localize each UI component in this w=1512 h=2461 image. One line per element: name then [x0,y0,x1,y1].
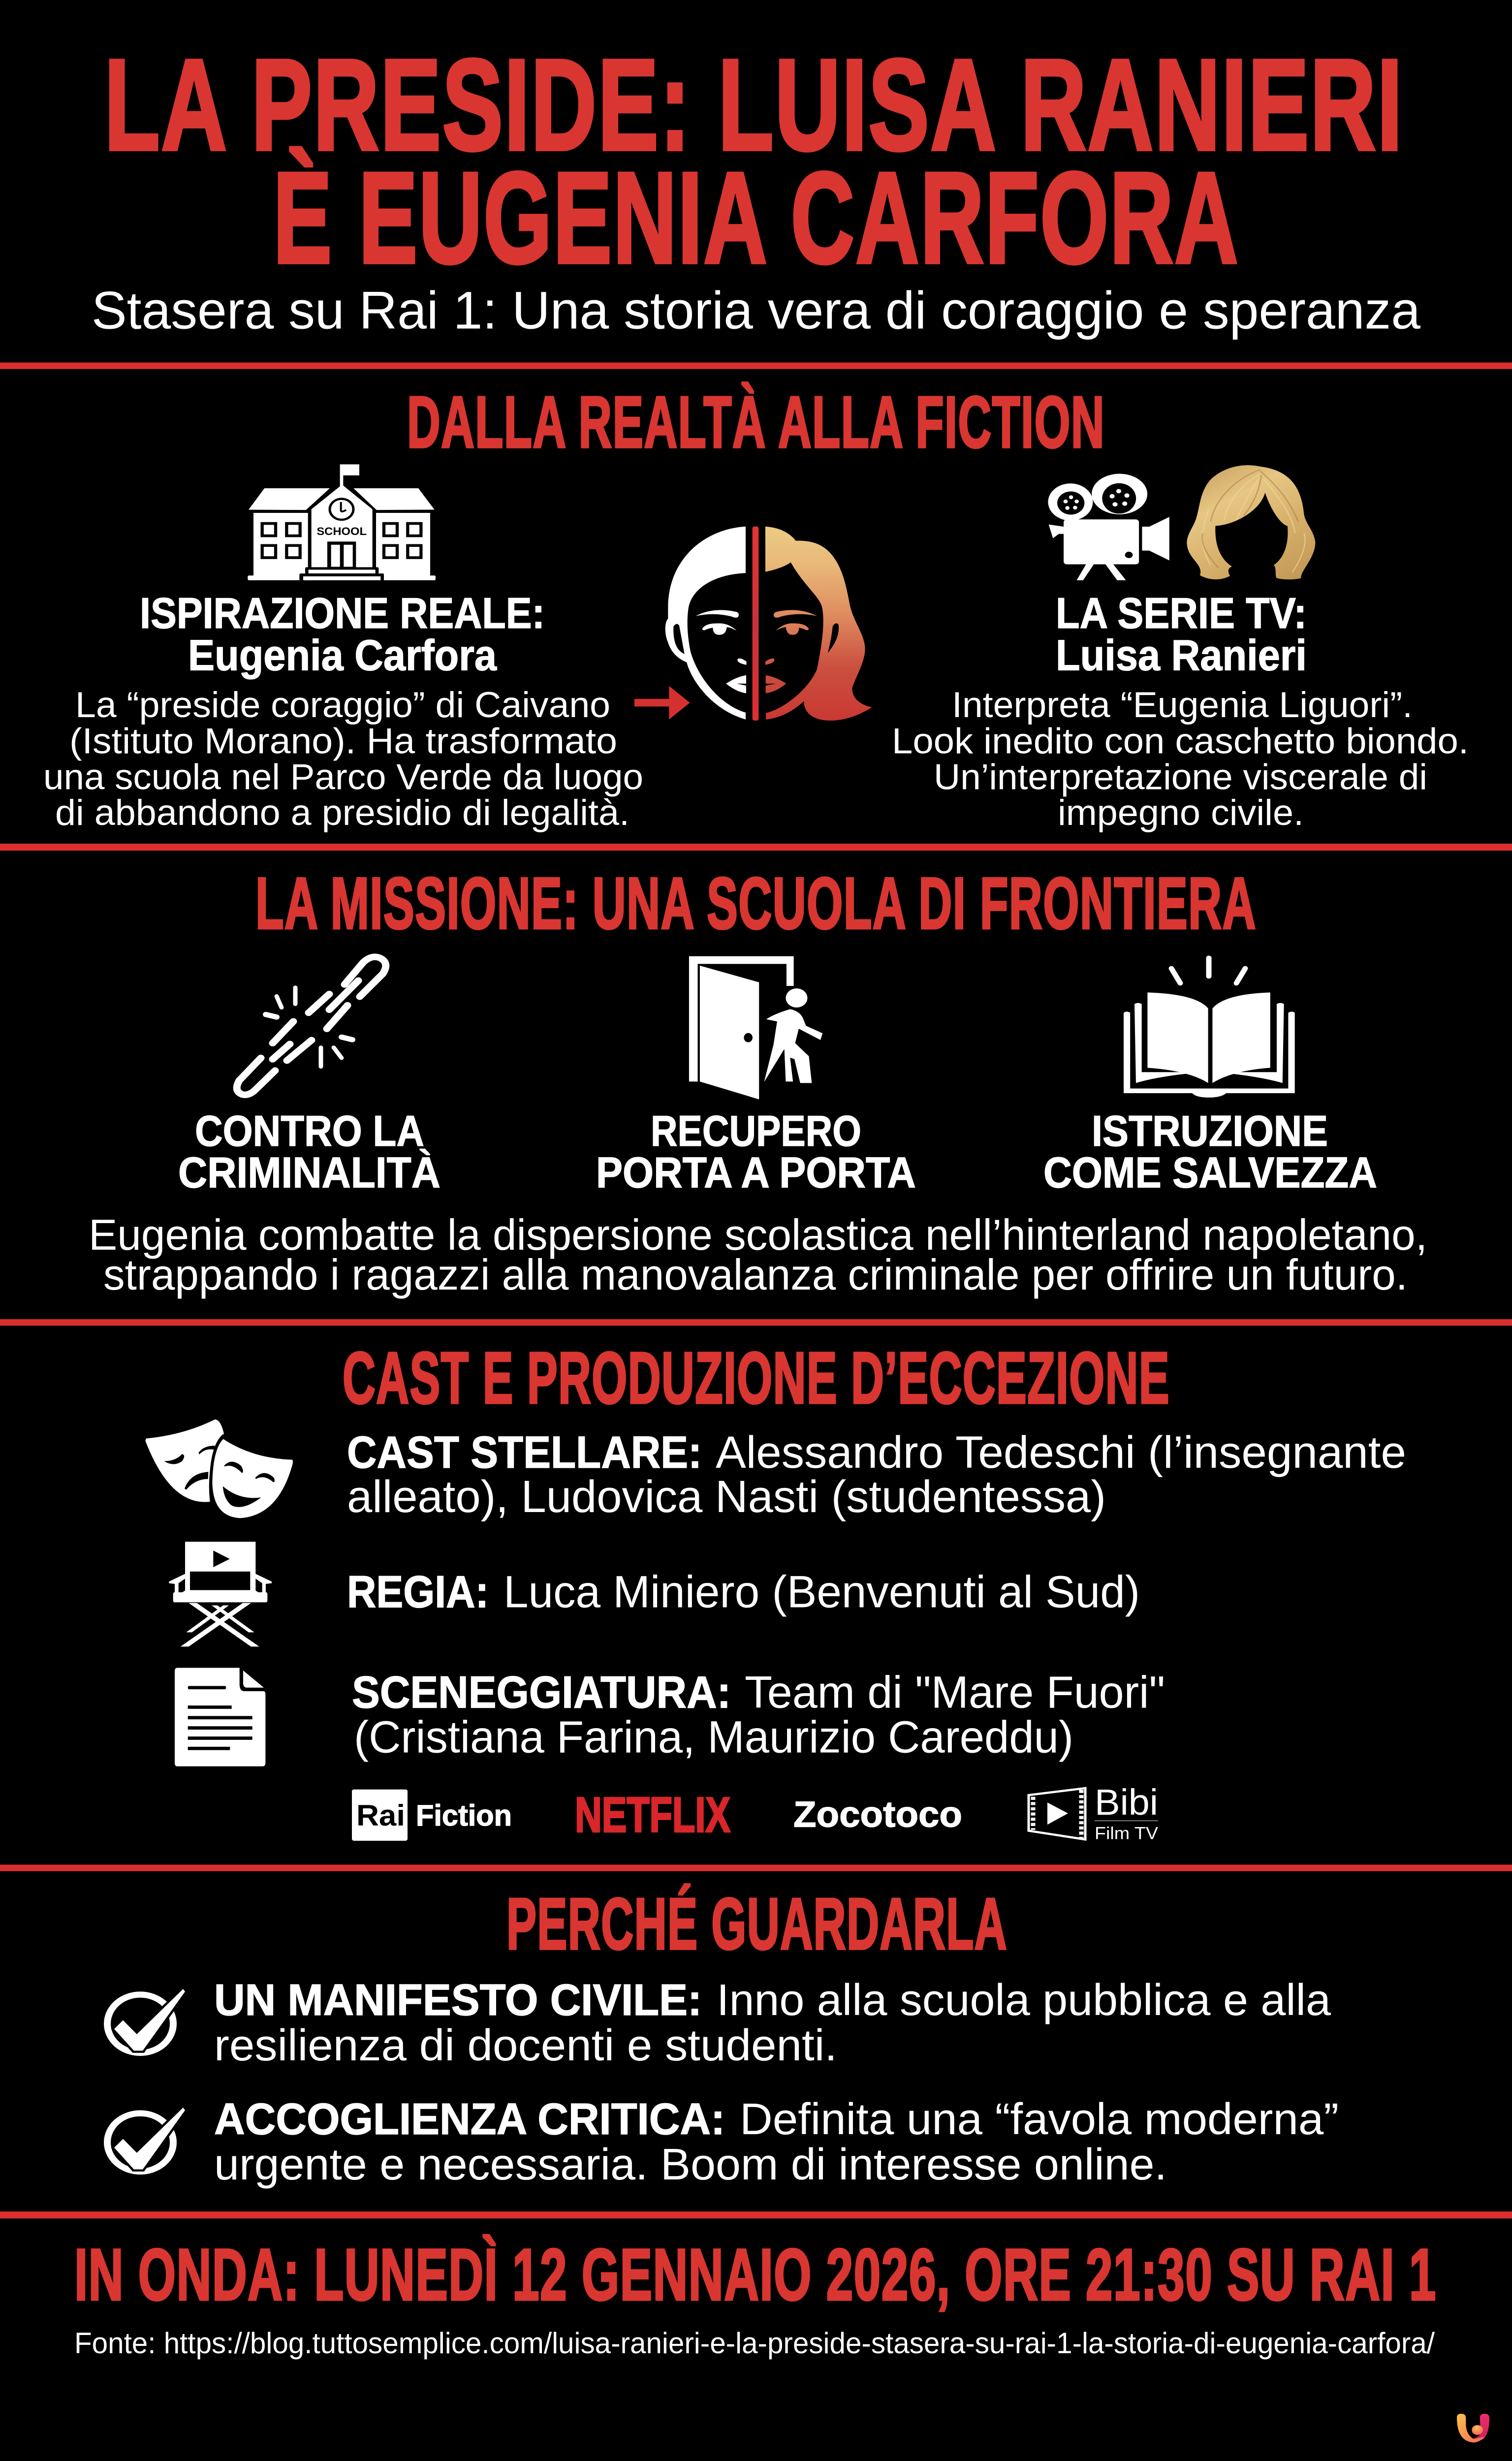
icon: open book [1124,958,1295,1098]
sceneggiatura text: SCENEGGIATURA: [352,1667,731,1717]
mission description [89,1210,1427,1299]
accoglienza critica text: Definita una “favola moderna” [740,2094,1339,2144]
right column: la serie tv: Un’interpretazione viscerale di [934,757,1427,797]
title [104,32,1404,290]
sceneggiatura text: Team di "Mare Fuori" [745,1667,1165,1717]
icon: check mark 2 [107,2108,185,2172]
logo: bibi film tv [1029,1781,1158,1843]
label: contro la criminalità: CRIMINALITÀ [178,1148,441,1197]
right column: la serie tv: Interpreta “Eugenia Liguori”. [952,685,1413,725]
left column: ispirazione reale: Eugenia Carfora [188,631,497,679]
right column: la serie tv: LA SERIE TV: [1056,589,1307,637]
icon: school: SCHOOL [316,525,367,537]
logo: rai fiction: Rai [356,1799,405,1832]
right column: la serie tv: impegno civile. [1058,792,1304,833]
icon: school [248,464,436,581]
label: recupero porta a porta: RECUPERO [651,1106,861,1155]
left column: ispirazione reale: una scuola nel Parco Verde da luogo [43,757,643,797]
right column: la serie tv: Look inedito con caschetto biondo. [892,721,1469,761]
un manifesto civile text: resilienza di docenti e studenti. [214,2020,837,2070]
panel: footer [74,2234,1489,2442]
un manifesto civile text: Inno alla scuola pubblica e alla [717,1975,1331,2025]
label: contro la criminalità [178,1106,441,1197]
icon: screenplay document [175,1668,265,1767]
arrow [634,686,690,720]
panel: perché guardarla [107,1883,1339,2189]
icon: door and walking person [689,956,822,1100]
regia text: REGIA: [347,1566,489,1617]
right column: la serie tv: Luisa Ranieri [1056,631,1307,679]
left column: ispirazione reale: di abbandono a presidio di legalità. [55,792,630,833]
cast stellare text: CAST STELLARE: [347,1427,702,1478]
panel: dalla realtà alla fiction [43,381,1469,833]
cast stellare text: Alessandro Tedeschi (l’insegnante [716,1427,1406,1478]
logo: rai fiction: Fiction [416,1799,512,1832]
regia text: Luca Miniero (Benvenuti al Sud) [504,1566,1140,1617]
sceneggiatura text [352,1667,1165,1762]
accoglienza critica text [214,2094,1339,2189]
label: istruzione come salvezza: COME SALVEZZA [1043,1148,1377,1197]
icon: check mark 1 [107,1989,185,2053]
label: recupero porta a porta [596,1106,916,1197]
sceneggiatura text: (Cristiana Farina, Maurizio Careddu) [354,1711,1073,1762]
accoglienza critica text: ACCOGLIENZA CRITICA: [214,2094,725,2144]
panel: cast e produzione [145,1337,1406,1843]
left column: ispirazione reale: ISPIRAZIONE REALE: [140,589,545,637]
icon: split face [665,527,872,721]
label: istruzione come salvezza [1043,1106,1377,1197]
icon: director chair [169,1542,272,1646]
logo: bibi film tv: Bibi [1095,1781,1158,1823]
left column: ispirazione reale [43,589,643,833]
label: istruzione come salvezza: ISTRUZIONE [1092,1106,1328,1155]
icon: blonde wig [1187,465,1315,579]
panel: la missione [89,862,1427,1299]
logo: bibi film tv: Film TV [1095,1823,1158,1843]
logo: watermark [1457,2414,1489,2442]
logo: rai fiction [352,1790,512,1841]
icon: theatre masks [145,1420,294,1520]
logo: netflix: NETFLIX [575,1787,730,1842]
logo: zocotoco: Zocotoco [793,1794,962,1835]
cast stellare text [347,1427,1406,1522]
icon: film camera [1048,474,1169,580]
label: contro la criminalità: CONTRO LA [195,1106,424,1155]
right column: la serie tv [892,589,1469,833]
heading: PERCHÉ GUARDARLA [506,1883,1008,1965]
un manifesto civile text [214,1975,1331,2070]
icon: broken chain [237,957,386,1095]
label: recupero porta a porta: PORTA A PORTA [596,1148,916,1197]
accoglienza critica text: urgente e necessaria. Boom di interesse online. [214,2140,1167,2189]
panel: header [92,32,1420,340]
left column: ispirazione reale: (Istituto Morano). Ha trasformato [69,721,617,761]
cast stellare text: alleato), Ludovica Nasti (studentessa) [347,1471,1106,1522]
un manifesto civile text: UN MANIFESTO CIVILE: [214,1975,702,2025]
left column: ispirazione reale: La “preside coraggio” di Caivano [75,685,610,725]
